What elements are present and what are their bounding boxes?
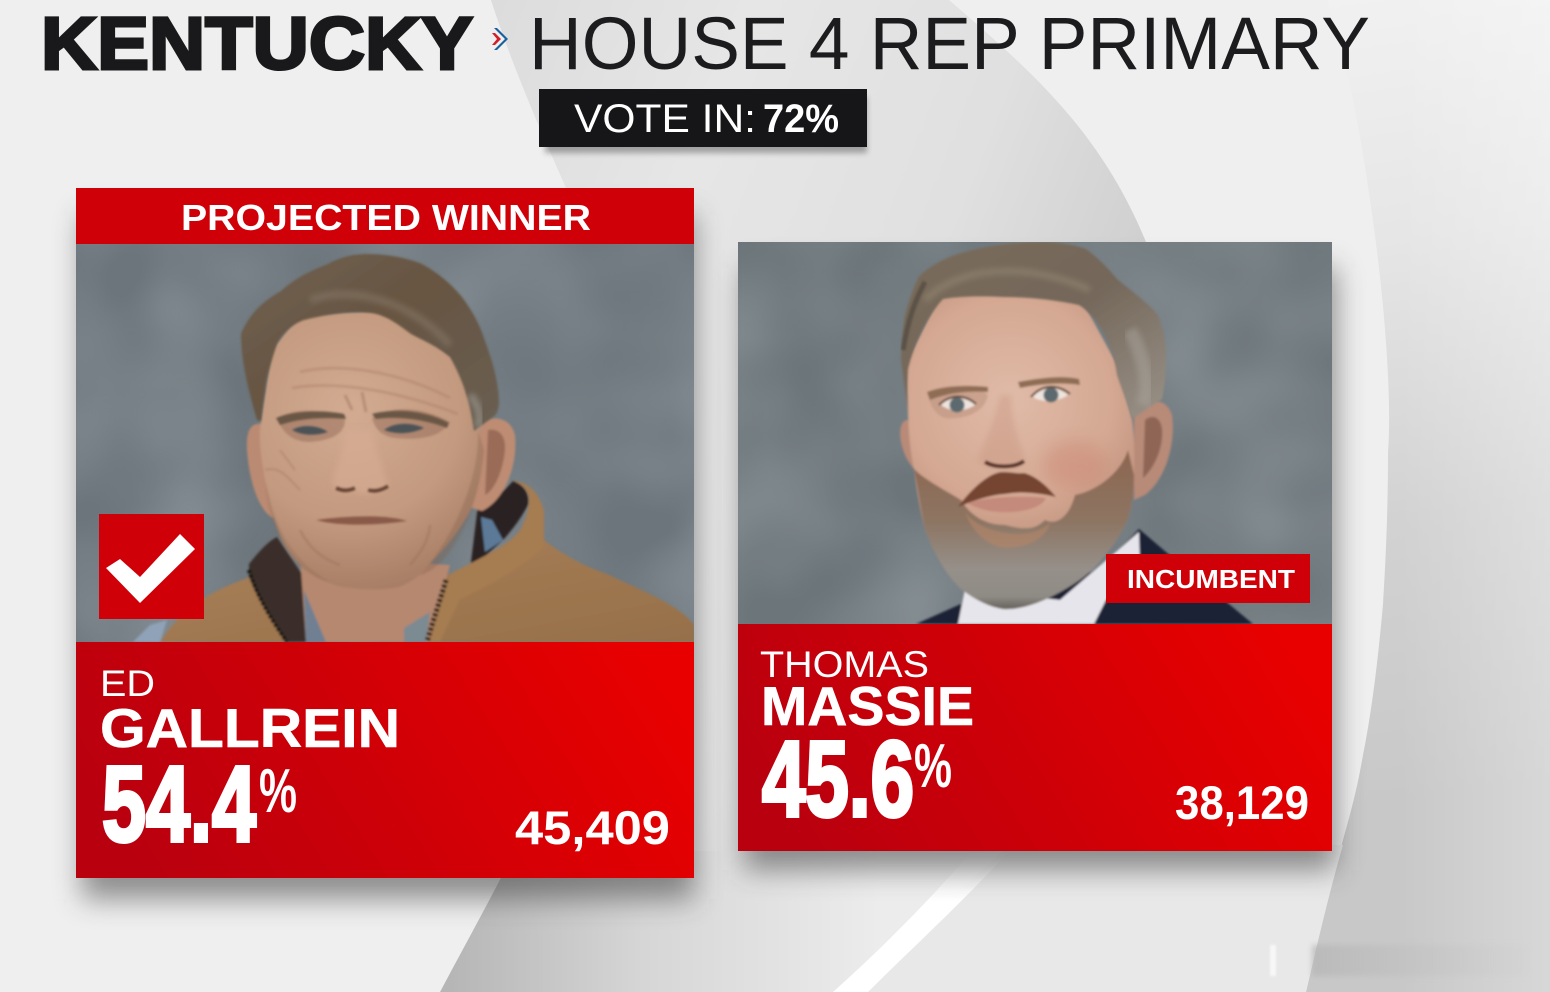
brows <box>276 411 346 425</box>
last name: GALLREIN <box>100 697 400 759</box>
hair highlights <box>310 294 450 345</box>
cheek flush <box>1043 441 1107 489</box>
percentage: % <box>914 732 952 801</box>
plaid shirt sleeve <box>133 620 167 642</box>
facial features <box>265 368 484 582</box>
moustache <box>958 472 1056 507</box>
first name: ED <box>100 663 155 704</box>
last name: MASSIE <box>761 675 974 737</box>
ears <box>900 420 914 469</box>
beard <box>914 450 1134 609</box>
eye sockets <box>930 391 988 418</box>
brows <box>927 386 988 400</box>
inner collar <box>470 481 528 570</box>
portrait: Thomas Massie <box>738 242 1332 624</box>
face <box>906 295 1136 530</box>
nose <box>334 460 388 494</box>
eyes <box>941 398 975 410</box>
projected winner banner <box>76 188 694 244</box>
eyes <box>292 426 328 435</box>
projected winner banner: PROJECTED WINNER <box>181 197 591 238</box>
face <box>260 310 481 589</box>
vote in badge: 72% <box>763 97 839 141</box>
eye sockets <box>277 411 345 442</box>
right collar <box>426 481 544 642</box>
mouth <box>316 516 407 525</box>
lips <box>968 497 1046 512</box>
portrait: Ed Gallrein <box>76 244 694 642</box>
card shadow <box>744 268 1336 870</box>
zippers <box>249 570 287 642</box>
shirt <box>958 532 1140 624</box>
results panel <box>738 624 1332 851</box>
checkmark badge <box>99 514 204 619</box>
card shadow <box>82 215 694 899</box>
icon: chevron <box>492 28 508 50</box>
chin skin <box>965 512 1050 548</box>
percentage: 45.6 <box>762 718 914 839</box>
jacket <box>160 540 694 642</box>
vote in badge: VOTE IN: <box>574 97 756 141</box>
hair highlights <box>925 271 1090 300</box>
suit <box>916 529 1253 624</box>
percentage: % <box>259 757 297 826</box>
nose <box>981 396 1022 464</box>
ears <box>246 422 274 518</box>
percentage: 54.4 <box>102 743 256 864</box>
first name: THOMAS <box>760 644 929 685</box>
title: race name: HOUSE 4 REP PRIMARY <box>529 2 1370 85</box>
watermark smudge <box>1270 945 1527 976</box>
incumbent badge: INCUMBENT <box>1127 564 1295 594</box>
left collar <box>249 537 310 642</box>
vote in badge <box>539 89 867 153</box>
panel: Thomas Massie card <box>738 242 1336 870</box>
title <box>41 2 1370 85</box>
vote count: 45,409 <box>515 801 670 854</box>
title: state name: KENTUCKY <box>41 2 473 85</box>
results panel <box>76 642 694 878</box>
vote count: 38,129 <box>1175 776 1309 829</box>
hair <box>241 254 499 431</box>
hair <box>901 242 1166 419</box>
neck <box>300 555 450 642</box>
panel: Ed Gallrein card <box>76 188 694 899</box>
incumbent badge <box>1106 554 1310 603</box>
